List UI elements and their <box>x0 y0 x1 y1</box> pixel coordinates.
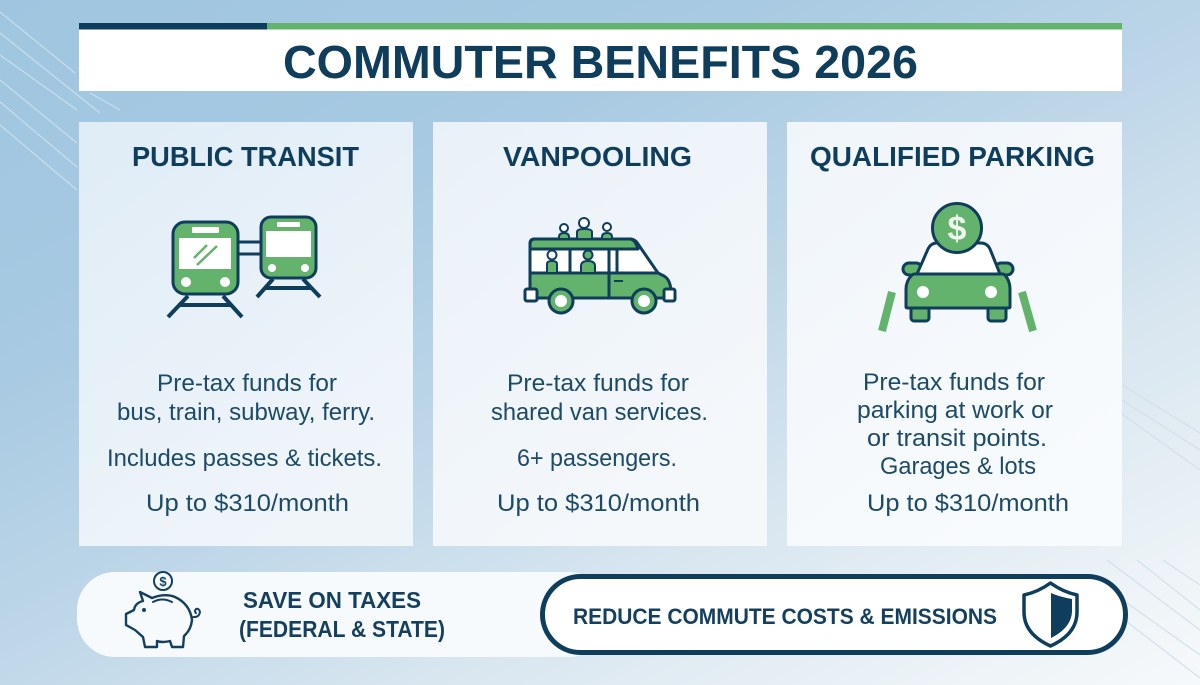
text: parking description: Up to $310/month <box>867 490 1069 517</box>
text: transit description: Includes passes & tickets. <box>107 445 382 472</box>
heading: vanpooling: VANPOOLING <box>503 141 692 172</box>
text: parking description: Pre-tax funds for <box>863 369 1045 396</box>
icon: van <box>525 218 675 313</box>
text: transit description <box>107 370 382 517</box>
title: COMMUTER BENEFITS 2026 <box>283 36 918 88</box>
icon: piggy bank: $ <box>159 574 167 589</box>
text: transit description: bus, train, subway, ferry. <box>117 399 375 426</box>
text: transit description: Up to $310/month <box>146 490 349 517</box>
callout: reduce costs and emissions: REDUCE COMMUTE COSTS & EMISSIONS <box>573 604 997 629</box>
text: vanpooling description: 6+ passengers. <box>517 445 677 472</box>
title banner <box>79 23 1122 91</box>
panel: vanpooling <box>433 122 767 546</box>
text: parking description <box>857 369 1069 517</box>
icon: trains <box>168 217 320 317</box>
callout: reduce costs and emissions <box>542 576 1126 652</box>
text: vanpooling description <box>491 370 708 517</box>
panel: qualified parking <box>787 122 1122 546</box>
text: vanpooling description: Up to $310/month <box>497 490 700 517</box>
panel: public transit <box>79 122 413 546</box>
text: vanpooling description: Pre-tax funds for <box>507 370 689 397</box>
text: save on taxes: SAVE ON TAXES <box>243 587 421 613</box>
icon: shield <box>1024 583 1077 646</box>
heading: public transit: PUBLIC TRANSIT <box>132 141 359 172</box>
bottom banner <box>77 572 1126 657</box>
text: parking description: or transit points. <box>867 425 1047 452</box>
heading: qualified parking: QUALIFIED PARKING <box>810 141 1095 172</box>
text: vanpooling description: shared van services. <box>491 399 708 426</box>
text: transit description: Pre-tax funds for <box>157 370 337 397</box>
text: save on taxes: (FEDERAL & STATE) <box>239 616 445 642</box>
text: save on taxes <box>239 587 445 642</box>
icon: piggy bank <box>126 572 200 647</box>
icon: car with dollar <box>882 204 1033 331</box>
text: parking description: parking at work or <box>857 397 1053 424</box>
icon: car with dollar: $ <box>948 210 967 248</box>
text: parking description: Garages & lots <box>880 453 1036 480</box>
